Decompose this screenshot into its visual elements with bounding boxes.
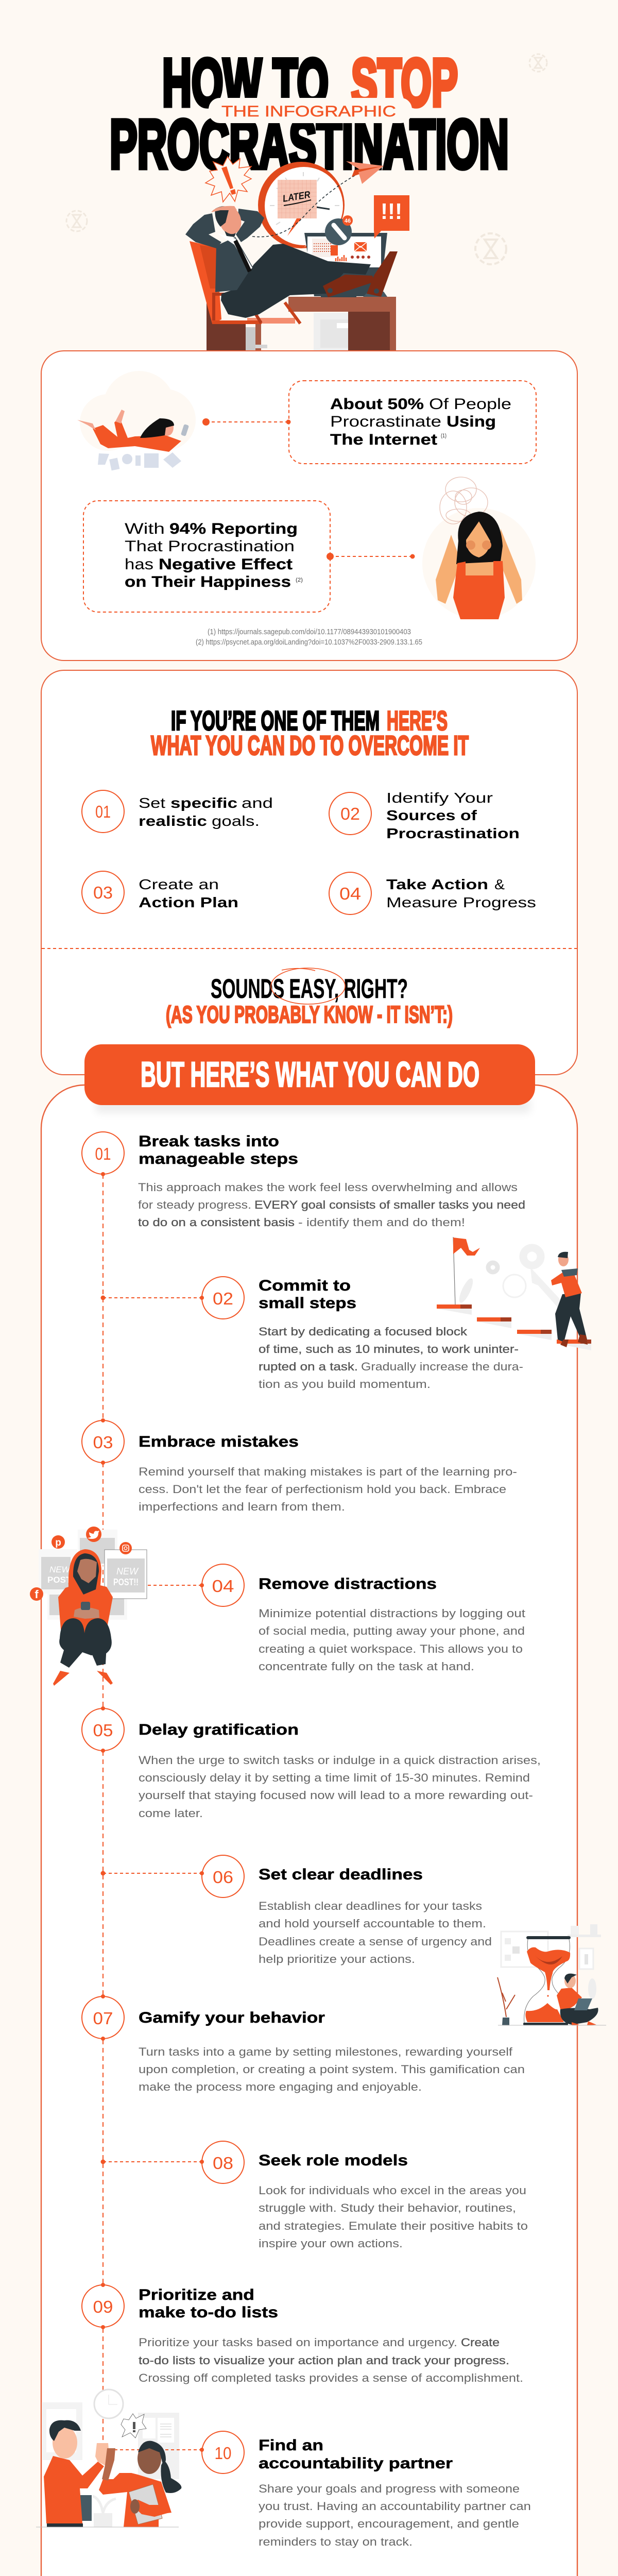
- illustration: procrastinating man at desk: [185, 157, 409, 351]
- step 01: - identify them and do them!: [298, 1216, 465, 1229]
- wall decor: [501, 1924, 601, 1999]
- subtitle pill: THE INFOGRAPHIC: [221, 103, 396, 120]
- step 06: [101, 1855, 492, 1965]
- woman: [53, 1549, 113, 1686]
- step 02: Start by dedicating a focused block: [259, 1325, 468, 1338]
- illustration: man climbing steps: [437, 1237, 591, 1350]
- panel: what you can do: [41, 670, 577, 1075]
- alert sign: [374, 195, 409, 239]
- step 02: of time, such as 10 minutes, to work uninter-: [259, 1343, 519, 1355]
- step 10: provide support, encouragement, and gentle: [259, 2517, 519, 2530]
- item 04: Measure Progress: [386, 894, 536, 910]
- shoes: [323, 251, 398, 297]
- step 01: for steady progress.: [138, 1198, 251, 1211]
- callout: 94 percent: (2): [296, 577, 303, 583]
- step 07: 07: [93, 2009, 113, 2028]
- posts: NEW: [49, 1565, 71, 1574]
- social icons: [30, 1527, 132, 1601]
- step 03: Embrace mistakes: [139, 1433, 299, 1450]
- callout: 94 percent: Negative Effect: [159, 556, 293, 573]
- man: [551, 1252, 588, 1347]
- item 01: 01: [95, 802, 111, 821]
- chair: [190, 241, 300, 324]
- step 09: Crossing off completed tasks provides a sense of accomplishment.: [139, 2371, 523, 2384]
- item 01: [82, 790, 273, 833]
- step 08: 08: [213, 2154, 233, 2173]
- step 03: imperfections and learn from them.: [139, 1500, 345, 1513]
- step 10: reminders to stay on track.: [259, 2535, 413, 2548]
- hourglass: [523, 1936, 571, 2025]
- connector: [327, 553, 415, 560]
- step 06: Deadlines create a sense of urgency and: [259, 1935, 492, 1948]
- step 09: 09: [93, 2297, 113, 2316]
- step 05: yourself that staying focused now will lead to a more rewarding out-: [139, 1789, 533, 1802]
- step 10: Share your goals and progress with someone: [259, 2482, 520, 2495]
- step 05: Delay gratification: [139, 1721, 299, 1738]
- step 10: [259, 2437, 531, 2548]
- step 01: EVERY goal consists of smaller tasks you need: [254, 1198, 525, 1211]
- posts: POST!!: [113, 1577, 139, 1587]
- step 09: Prioritize your tasks based on importance and urgency.: [139, 2336, 457, 2349]
- head: [211, 204, 244, 237]
- heading: HERE’S: [387, 706, 448, 736]
- callout: 94 percent: on Their Happiness: [125, 573, 291, 590]
- callout: 94 percent: With: [125, 520, 165, 537]
- step 08: struggle with. Study their behavior, routines,: [259, 2201, 516, 2214]
- step 09: Prioritize and: [139, 2286, 254, 2303]
- callout: 50 percent: Of People: [429, 396, 511, 413]
- step 10: you trust. Having an accountability partner can: [259, 2500, 531, 2513]
- connector: [202, 418, 290, 426]
- sounds easy heading: [166, 974, 453, 1028]
- step 05: come later.: [139, 1807, 203, 1820]
- heading: IF YOU’RE ONE OF THEM: [171, 706, 380, 736]
- item 04: Take Action: [386, 876, 488, 892]
- step 01: to do on a consistent basis: [138, 1216, 295, 1229]
- illustration: woman on phone with social posts: [30, 1527, 147, 1686]
- step 02: Gradually increase the dura-: [361, 1360, 523, 1373]
- illustration: stressed woman: [422, 477, 536, 619]
- step 01: 01: [95, 1144, 111, 1163]
- step 08: inspire your own actions.: [259, 2237, 403, 2250]
- illustration: high five: [36, 2389, 244, 2527]
- heading: [151, 706, 469, 761]
- posts: POST!!: [47, 1575, 77, 1585]
- step 05: When the urge to switch tasks or indulge in a quick distraction arises,: [139, 1754, 541, 1767]
- item 04: &: [494, 876, 505, 892]
- item 03: Create an: [139, 876, 219, 892]
- step 08: [101, 2141, 528, 2250]
- step 05: [82, 1706, 541, 1820]
- shirt and tie: [217, 233, 252, 272]
- paper plane: [252, 161, 384, 237]
- monitor: [304, 233, 387, 297]
- step 08: Seek role models: [259, 2152, 408, 2169]
- step 02: tion as you build momentum.: [259, 1378, 431, 1391]
- hand drawn ellipse: [271, 968, 345, 1004]
- social icons: f: [35, 1588, 39, 1601]
- woman: [99, 2441, 181, 2527]
- step 07: make the process more engaging and enjoyable.: [139, 2080, 422, 2093]
- social icons: p: [55, 1537, 61, 1548]
- plant: [497, 1977, 515, 2025]
- timeline: [102, 1174, 104, 2450]
- man with laptop: [557, 1974, 598, 2025]
- sounds easy heading: (AS YOU PROBABLY KNOW - IT ISN’T:): [166, 1001, 453, 1028]
- phone badge: [325, 215, 353, 245]
- title top line: STOP: [351, 45, 458, 120]
- step 02: rupted on a task.: [259, 1360, 358, 1373]
- step 02: 02: [213, 1289, 233, 1308]
- step 06: Set clear deadlines: [259, 1866, 423, 1883]
- item 01: specific: [170, 795, 237, 811]
- step 10: accountability partner: [259, 2455, 453, 2472]
- item 02: Sources of: [386, 807, 477, 823]
- desk: [207, 297, 396, 351]
- callout: 50 percent: Procrastinate: [330, 413, 441, 430]
- item 03: [82, 871, 238, 913]
- step 04: [148, 1564, 526, 1673]
- step 06: 06: [213, 1868, 233, 1887]
- callout: 94 percent: has: [125, 556, 153, 573]
- icon: decorative hourglass top right: [529, 54, 547, 72]
- step 06: Establish clear deadlines for your tasks: [259, 1900, 482, 1912]
- step 06: help prioritize your actions.: [259, 1953, 415, 1965]
- step 04: 04: [212, 1577, 234, 1596]
- jacket: [215, 237, 252, 292]
- step 02: Commit to: [259, 1277, 351, 1294]
- man: [185, 204, 371, 318]
- step 03: 03: [93, 1433, 113, 1452]
- callout: 94 percent: That Procrastination: [125, 538, 295, 555]
- panel: statistics: [41, 351, 577, 660]
- steps: [437, 1304, 591, 1350]
- step 09: Create: [461, 2336, 500, 2349]
- panel: steps: [30, 1085, 606, 2576]
- step 04: Minimize potential distractions by logging out: [259, 1607, 526, 1620]
- step 02: small steps: [259, 1295, 356, 1312]
- item 03: Action Plan: [139, 894, 238, 910]
- gears: [488, 1248, 564, 1309]
- flag: [453, 1237, 480, 1306]
- step 03: cess. Don't let the fear of perfectionism hold you back. Embrace: [139, 1483, 506, 1496]
- step 04: concentrate fully on the task at hand.: [259, 1660, 474, 1673]
- item 01: and: [242, 795, 273, 811]
- item 04: 04: [339, 884, 361, 903]
- step 08: and strategies. Emulate their positive habits to: [259, 2219, 528, 2232]
- subtitle pill: [209, 98, 412, 123]
- banner: but here's what you can do: [84, 1044, 535, 1113]
- item 04: [329, 872, 536, 914]
- callout: 50 percent: (1): [441, 433, 447, 439]
- number 10 label: 10: [214, 2444, 232, 2463]
- step 04: Remove distractions: [259, 1575, 437, 1592]
- starburst: [205, 157, 251, 202]
- step 07: Turn tasks into a game by setting milestones, rewarding yourself: [139, 2045, 513, 2058]
- step 03: Remind yourself that making mistakes is part of the learning pro-: [139, 1465, 517, 1478]
- item 01: goals.: [212, 813, 260, 829]
- illustration: woman lying with phone: [77, 371, 196, 470]
- icon: decorative hourglass left: [66, 211, 87, 231]
- references: [196, 628, 422, 647]
- step 04: creating a quiet workspace. This allows you to: [259, 1642, 523, 1655]
- sticky note: LATER: [282, 190, 311, 205]
- callout: 50 percent: Using: [447, 413, 496, 430]
- step 09: make to-do lists: [139, 2304, 278, 2321]
- item 02: 02: [340, 804, 360, 823]
- title top line: HOW TO: [162, 45, 329, 120]
- callout: 50 percent: About 50%: [330, 396, 424, 413]
- step 01: manageable steps: [139, 1150, 298, 1167]
- step 07: upon completion, or creating a point system. This gamification can: [139, 2063, 525, 2076]
- step 09: [82, 2283, 523, 2384]
- posts: NEW: [116, 1566, 139, 1577]
- phone badge: 46: [345, 218, 351, 224]
- step 05: consciously delay it by setting a time limit of 15-30 minutes. Remind: [139, 1771, 530, 1784]
- step 01: This approach makes the work feel less overwhelming and allows: [138, 1181, 518, 1194]
- connector: [103, 2431, 244, 2473]
- callout: 50 percent: The Internet: [330, 431, 437, 448]
- step 01: Break tasks into: [139, 1133, 279, 1150]
- callout: 94 percent: 94% Reporting: [169, 520, 298, 537]
- step 05: 05: [93, 1721, 113, 1740]
- illustration: hourglass and man: [497, 1924, 606, 2025]
- step 07: Gamify your behavior: [139, 2009, 325, 2026]
- alert sign: !!!: [381, 199, 402, 224]
- item 02: Identify Your: [386, 790, 493, 806]
- right arm: [236, 209, 264, 242]
- item 01: Set: [139, 795, 165, 811]
- step 10: Find an: [259, 2437, 323, 2454]
- step 06: and hold yourself accountable to them.: [259, 1917, 486, 1930]
- step 08: Look for individuals who excel in the areas you: [259, 2184, 526, 2197]
- item 01: realistic: [139, 813, 207, 829]
- callout: 50 percent: [289, 381, 536, 464]
- office background: [42, 2389, 179, 2527]
- icon: decorative hourglass right: [475, 233, 506, 264]
- step 07: [82, 1994, 525, 2093]
- references: (1) https://journals.sagepub.com/doi/10.1177/089443930101900403: [208, 628, 411, 636]
- sticky note: [278, 180, 317, 218]
- posts: [39, 1530, 147, 1620]
- clock: [258, 162, 345, 248]
- step 09: to-do lists to visualize your action plan and track your progress.: [139, 2354, 509, 2367]
- item 02: Procrastination: [386, 825, 520, 841]
- step 02: [101, 1277, 523, 1391]
- item 03: 03: [93, 883, 113, 902]
- trousers: [221, 244, 371, 318]
- callout: 94 percent: [83, 501, 330, 612]
- sounds easy heading: SOUNDS EASY, RIGHT?: [211, 974, 408, 1004]
- step 03: [82, 1418, 517, 1513]
- item 02: [329, 790, 520, 841]
- man: [44, 2420, 109, 2527]
- step 01: [82, 1132, 525, 1229]
- step 04: of social media, putting away your phone, and: [259, 1624, 525, 1637]
- starburst: [121, 2414, 146, 2438]
- arms: [185, 213, 221, 248]
- references: (2) https://psycnet.apa.org/doiLanding?doi=10.1037%2F0033-2909.133.1.65: [196, 638, 422, 647]
